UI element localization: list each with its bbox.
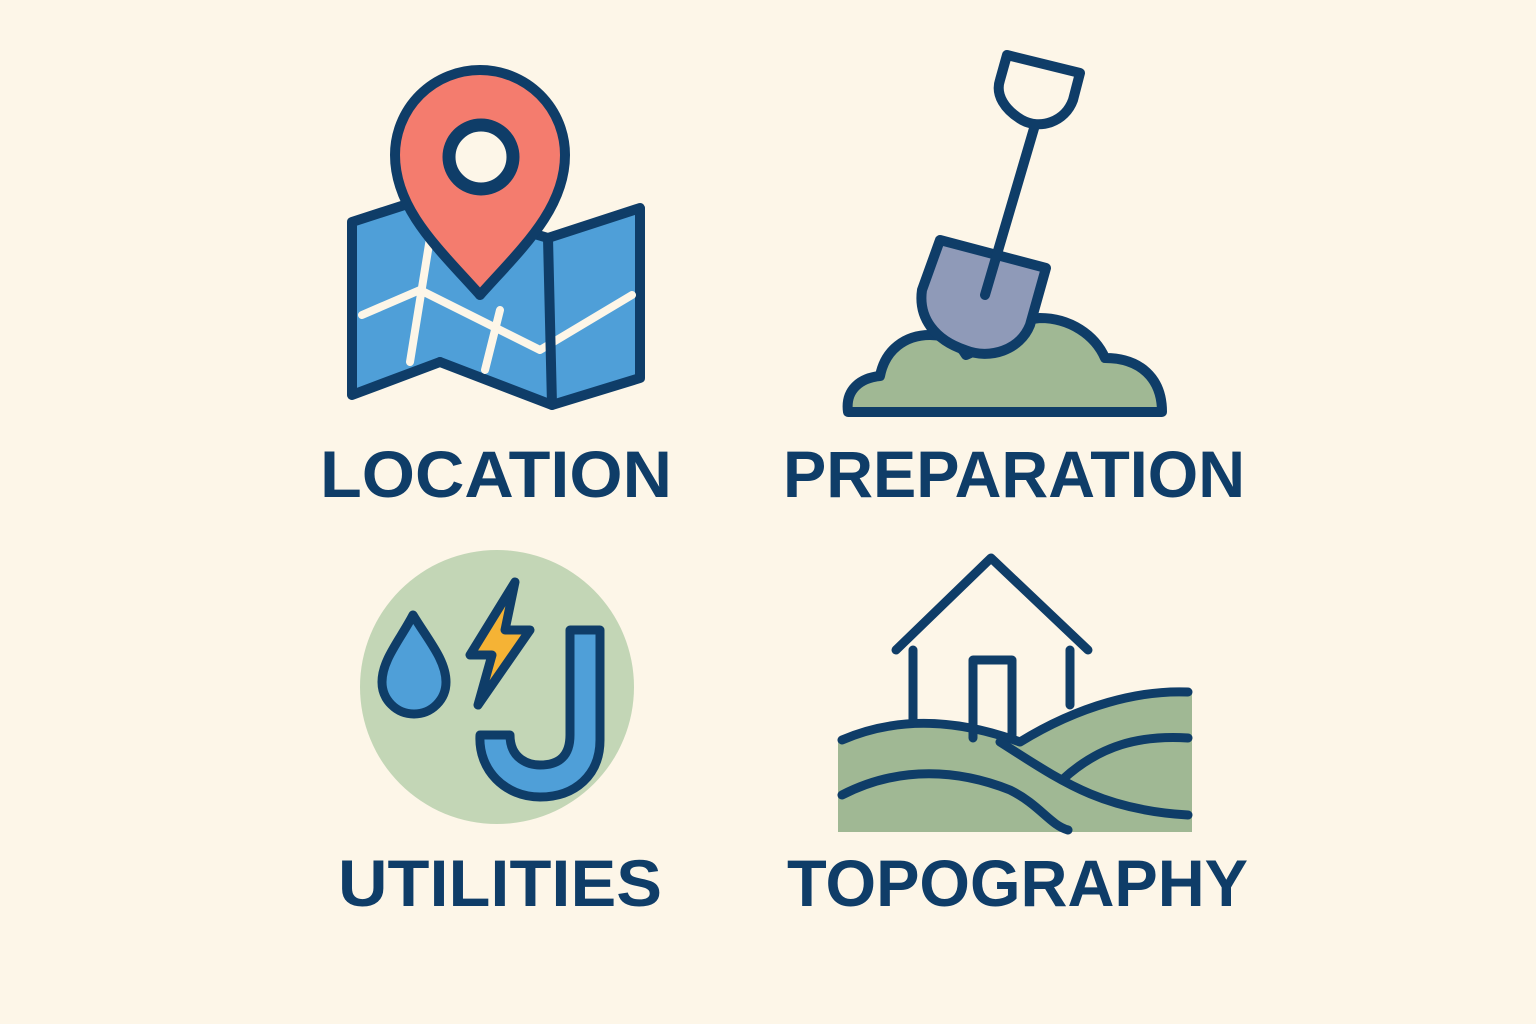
icon: house on hills	[838, 558, 1192, 832]
icon: map with location pin	[352, 70, 640, 405]
icon: utilities	[360, 550, 634, 824]
heading: utilities: UTILITIES	[338, 846, 662, 920]
heading: topography: TOPOGRAPHY	[787, 846, 1248, 920]
icon: shovel in soil	[848, 55, 1162, 412]
heading: preparation: PREPARATION	[783, 437, 1245, 511]
heading: location: LOCATION	[320, 437, 672, 511]
